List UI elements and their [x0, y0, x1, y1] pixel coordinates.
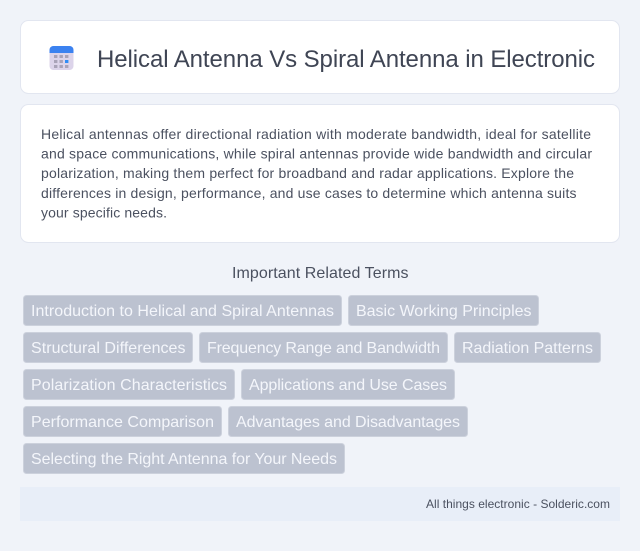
tag: Applications and Use Cases — [249, 377, 447, 394]
tag: Selecting the Right Antenna for Your Needs — [31, 451, 337, 468]
text block: description — [41, 126, 592, 220]
tag — [24, 296, 342, 326]
tag — [242, 370, 454, 400]
text block: description: and space communications, while spiral antennas provide wide bandwidth and circular — [41, 146, 592, 162]
footer credit: All things electronic - Solderic.com — [426, 497, 610, 511]
panel: description — [20, 104, 620, 242]
tag: Structural Differences — [31, 340, 186, 357]
tag list — [24, 296, 600, 474]
tag: Polarization Characteristics — [31, 377, 227, 394]
tag — [228, 406, 468, 436]
tag — [24, 370, 234, 400]
tag — [24, 444, 344, 474]
tag — [348, 296, 538, 326]
title: Helical Antenna Vs Spiral Antenna in Electronic — [97, 46, 595, 73]
text block: description: your specific needs. — [41, 204, 167, 220]
tag: Introduction to Helical and Spiral Antennas — [31, 303, 334, 320]
tag: Advantages and Disadvantages — [236, 414, 460, 431]
tag: Basic Working Principles — [356, 303, 532, 320]
text block: description: Helical antennas offer directional radiation with moderate bandwidth, ideal for satellite — [41, 126, 591, 142]
text block: description: differences in design, performance, and use cases to determine which antenna suits — [41, 185, 576, 201]
tag: Performance Comparison — [31, 414, 214, 431]
footer — [20, 487, 620, 521]
tag — [24, 332, 192, 362]
tag — [454, 332, 600, 362]
panel: header — [20, 20, 620, 94]
tag — [24, 406, 222, 436]
tag: Radiation Patterns — [462, 340, 593, 357]
tag — [200, 332, 448, 362]
tag: Frequency Range and Bandwidth — [207, 340, 440, 357]
icon: calendar — [50, 46, 74, 70]
heading: related terms: Important Related Terms — [232, 265, 408, 282]
text block: description: polarization, making them perfect for broadband and radar applications. Explore the — [41, 165, 574, 181]
